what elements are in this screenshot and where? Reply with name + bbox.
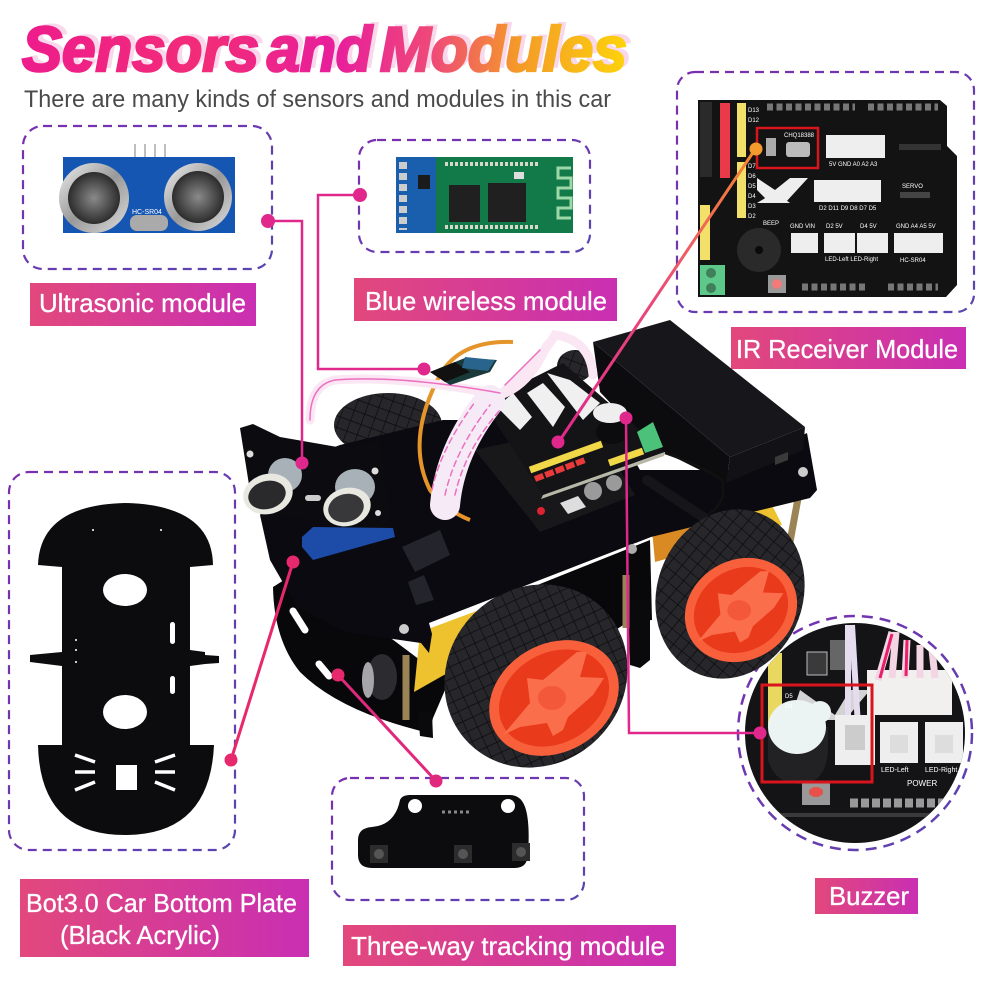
icon: shield board: D4 5V: [860, 224, 877, 230]
power cable: [647, 453, 723, 517]
icon: buzzer close-up: LED-Left: [881, 767, 909, 774]
label: bottom plate: Bot3.0 Car Bottom Plate: [26, 888, 297, 918]
label: bottom plate: (Black Acrylic): [60, 920, 220, 950]
icon: shield board: D7: [748, 164, 756, 170]
icon: shield board: D2 5V: [826, 224, 843, 230]
label: IR receiver module: IR Receiver Module: [736, 334, 958, 364]
icon: tracking sensor board: [358, 795, 530, 868]
orange servo wire: [420, 342, 513, 520]
title: Sensors: [22, 15, 259, 85]
subtitle: There are many kinds of sensors and modules in this car: [24, 86, 611, 113]
connector: tracking line: [332, 668, 442, 788]
panel: blue wireless module: [359, 140, 590, 252]
icon: shield board: D4: [748, 194, 756, 200]
icon: shield board: GND VIN: [790, 224, 815, 230]
label: three-way tracking module: Three-way tracking module: [351, 931, 665, 961]
ultrasonic sensor on car: [239, 424, 390, 532]
front right wheel: [632, 488, 828, 700]
label: bottom plate: [20, 879, 309, 957]
yellow pin row: [530, 444, 602, 470]
right bracket: [628, 600, 650, 668]
label: blue wireless module: [354, 278, 617, 321]
icon: shield board: D13: [748, 108, 760, 114]
title: Modules: [386, 12, 633, 82]
panel: IR receiver module: [677, 72, 974, 312]
label: blue wireless module: Blue wireless module: [365, 286, 607, 316]
panel: buzzer: [738, 616, 972, 850]
icon: bluetooth module: [396, 157, 573, 233]
icon: shield board: D6: [748, 174, 756, 180]
label: buzzer: Buzzer: [829, 881, 909, 911]
front left wheel: [407, 547, 665, 805]
green terminal: [637, 422, 663, 453]
connector: wireless line: [318, 188, 430, 376]
icon: ultrasonic sensor board: [59, 144, 235, 233]
bluetooth module on car: [430, 357, 497, 385]
icon: shield board: D2: [748, 214, 756, 220]
title: and: [267, 15, 373, 85]
standoff posts: [406, 493, 799, 720]
bottom plate slots: [293, 611, 329, 676]
label: buzzer: [815, 878, 918, 914]
icon: buzzer close-up: D5: [785, 694, 793, 700]
panel: three-way tracking module: [332, 778, 584, 900]
panel: bottom plate: [9, 472, 235, 850]
rear back wheel: [557, 350, 593, 382]
caster wheel: [367, 654, 397, 700]
lower bracket: [418, 712, 433, 738]
title: [22, 12, 633, 85]
connector: ultrasonic line: [261, 214, 308, 470]
title: and: [273, 12, 379, 82]
ribbon cables: [310, 335, 593, 505]
label: IR receiver module: [731, 327, 966, 369]
icon: shield board: D12: [748, 118, 760, 124]
servo: [302, 527, 395, 560]
lower board: [475, 440, 635, 532]
icon: shield board: CHQ18388: [784, 133, 815, 139]
icon: shield board: D5: [748, 184, 756, 190]
icon: buzzer close-up: [740, 620, 970, 846]
battery box: [593, 320, 805, 483]
icon: shield board: D2 D11 D9 D8 D7 D5: [819, 206, 877, 212]
icon: shield board: HC-SR04: [900, 258, 926, 264]
label: ultrasonic module: [30, 283, 256, 326]
icon: shield board: GND A4 A5 5V: [896, 224, 936, 230]
rear left wheel: [334, 393, 442, 457]
icon: buzzer close-up: POWER: [907, 779, 937, 788]
icon: shield board: 5V GND A0 A2 A3: [829, 162, 878, 168]
title: Modules: [380, 15, 627, 85]
car: robot illustration: [239, 320, 828, 805]
plate reflections: [402, 530, 450, 605]
label: three-way tracking module: [343, 925, 676, 966]
icon: shield board: BEEP: [763, 221, 779, 227]
icon: ultrasonic sensor board: HC-SR04: [132, 209, 162, 216]
icon: buzzer close-up: D4: [785, 704, 793, 710]
connector: IR receiver line: [552, 142, 762, 448]
icon: shield board: SERVO: [902, 184, 923, 190]
top plate: [260, 400, 817, 653]
connector: buzzer line: [620, 412, 766, 740]
icon: shield board: [698, 100, 957, 297]
panel: ultrasonic module: [23, 126, 272, 269]
title: Sensors: [28, 12, 265, 82]
white connectors: [497, 373, 600, 430]
yellow motors: [414, 603, 498, 692]
icon: shield board: D3: [748, 204, 756, 210]
control board: [483, 363, 665, 515]
label: ultrasonic module: Ultrasonic module: [39, 288, 246, 318]
icon: black acrylic plate: [30, 503, 219, 835]
icon: shield board: LED-Left LED-Right: [825, 257, 878, 263]
connector: bottom plate line: [224, 556, 300, 766]
icon: buzzer close-up: LED-Right: [925, 767, 957, 774]
bottom plate of car: [273, 540, 652, 733]
